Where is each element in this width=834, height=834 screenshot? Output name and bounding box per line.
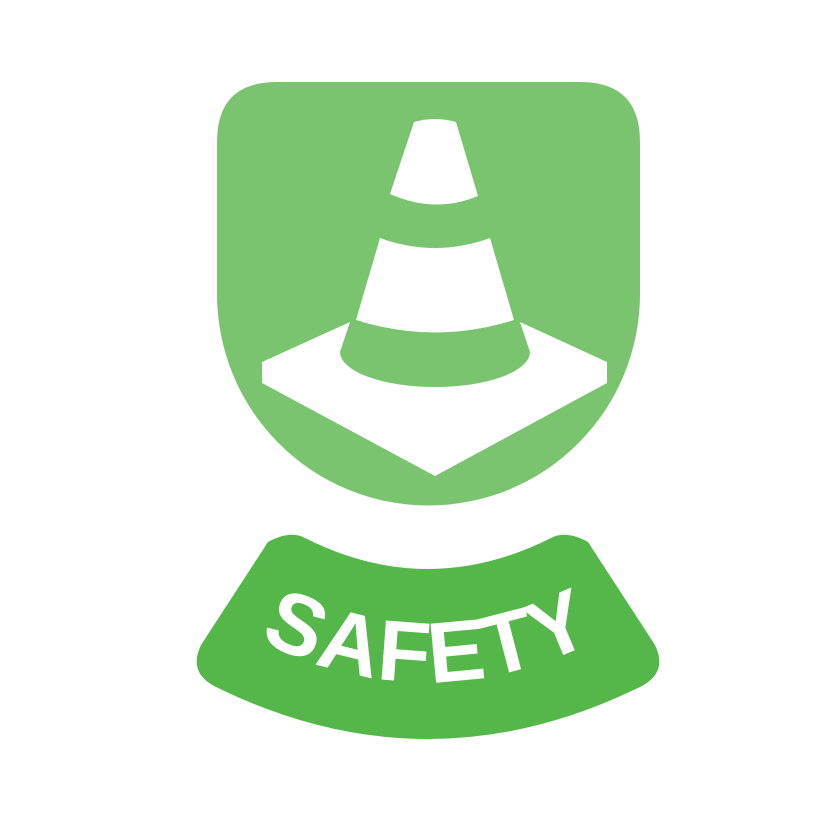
icon: traffic cone — [262, 119, 607, 476]
shield — [217, 82, 640, 506]
banner: SAFETY — [196, 534, 660, 739]
banner text: SAFETY — [266, 588, 575, 683]
